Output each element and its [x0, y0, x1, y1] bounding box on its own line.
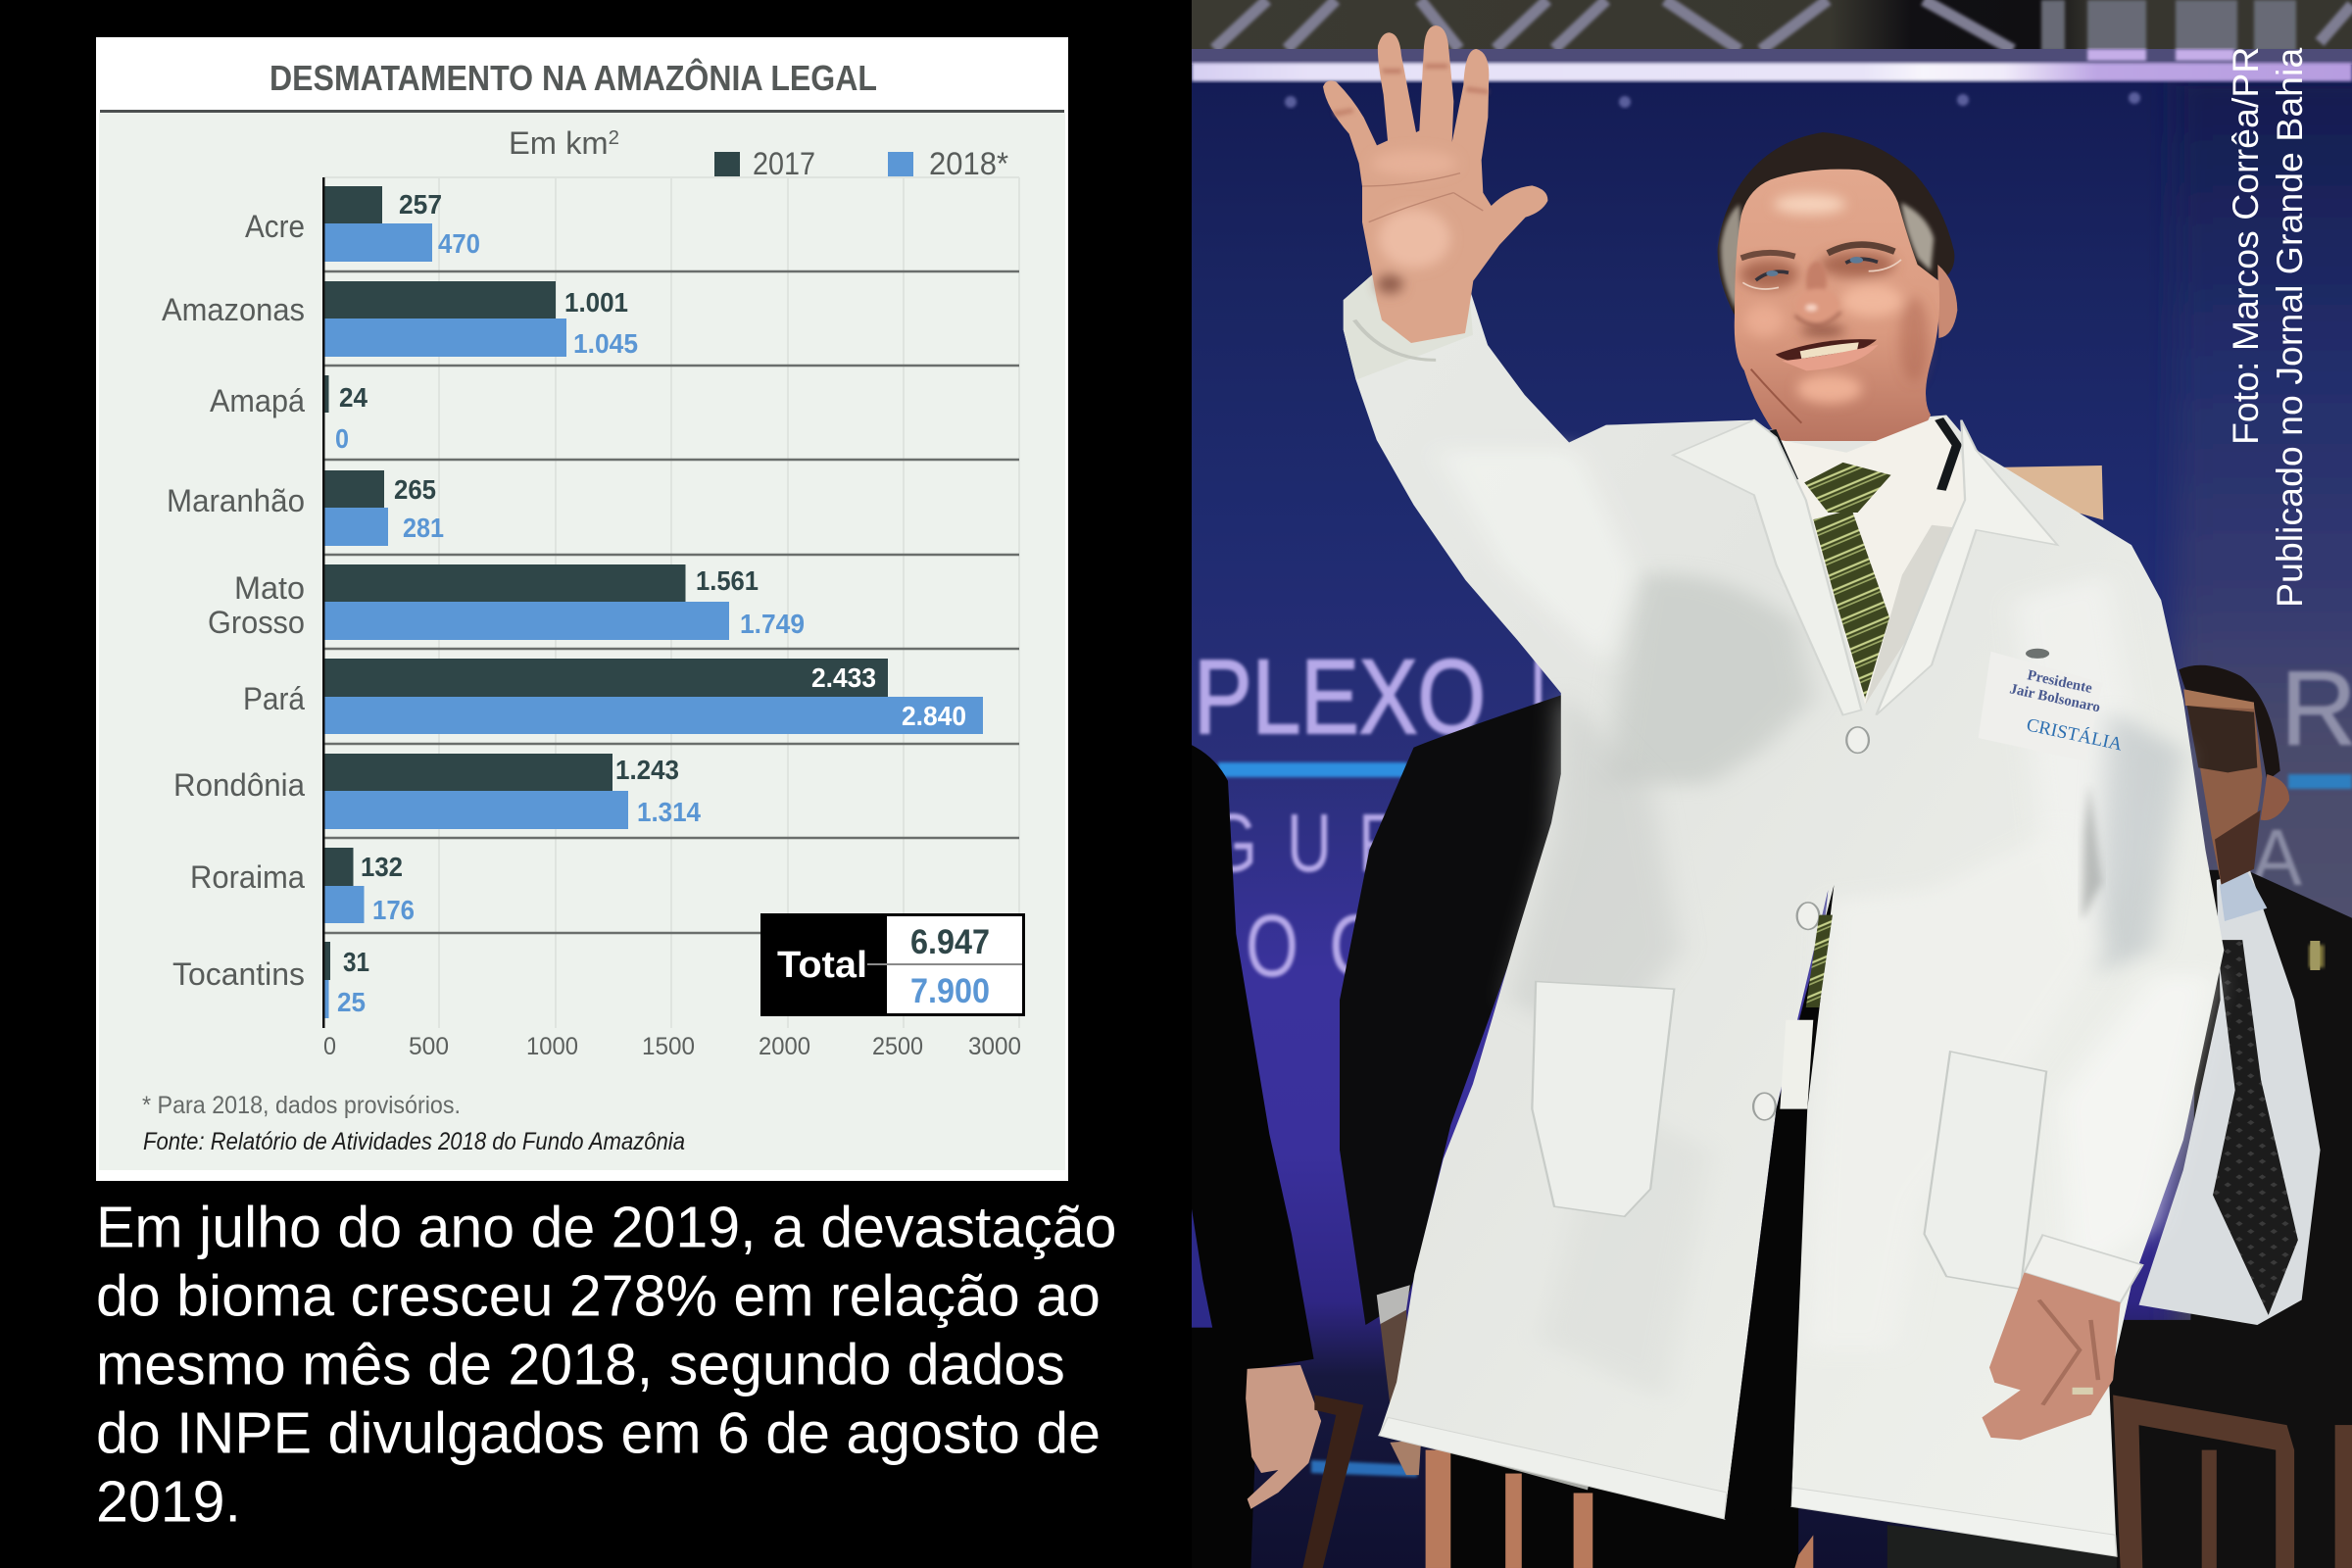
x axis labels: 2500 — [872, 1033, 923, 1060]
unit label: Em km — [509, 125, 607, 161]
backdrop lettering: PLEXO — [1194, 637, 1486, 756]
total box — [760, 913, 1025, 1016]
value labels: 281 — [403, 513, 444, 543]
backdrop lettering: I — [1530, 637, 1546, 756]
people and furniture behind — [1192, 665, 2352, 1568]
gold object behind shoulder — [1992, 466, 2103, 520]
value labels — [335, 189, 966, 1017]
state labels: Mato — [234, 570, 305, 606]
value labels: 1.314 — [637, 797, 701, 827]
x axis labels: 2000 — [759, 1033, 810, 1060]
x axis labels: 0 — [323, 1033, 336, 1060]
value labels: 1.561 — [696, 565, 759, 596]
value labels: 176 — [372, 895, 415, 925]
x axis labels: 500 — [409, 1033, 449, 1060]
badge text: CRISTÁLIA — [2025, 713, 2125, 756]
badge text: Jair Bolsonaro — [2008, 681, 2101, 715]
value labels: 2.840 — [902, 701, 966, 731]
head — [1718, 132, 1957, 441]
value labels: 31 — [343, 947, 369, 977]
text block: INPE paragraph: Em julho do ano de 2019, a devastação — [96, 1194, 1116, 1260]
value labels: 1.243 — [615, 755, 679, 785]
state labels: Pará — [243, 681, 305, 716]
value labels: 25 — [337, 987, 366, 1017]
photo credit: Publicado no Jornal Grande Bahia — [2269, 48, 2310, 608]
total box: 7.900 — [910, 972, 990, 1010]
value labels: 132 — [361, 852, 403, 882]
photo credit: Foto: Marcos Corrêa/PR — [2225, 47, 2266, 445]
value labels: 2.433 — [811, 662, 876, 693]
hem lining — [1468, 1457, 1589, 1490]
truss — [1192, 0, 2352, 108]
coat opening — [1725, 885, 1834, 1519]
white coat — [1344, 274, 2224, 1556]
value labels: 265 — [394, 474, 436, 505]
text block: INPE paragraph: do INPE divulgados em 6 de agosto de — [96, 1399, 1101, 1466]
tie — [1804, 463, 1891, 699]
coat shading — [1436, 450, 2213, 1400]
footnote: * Para 2018, dados provisórios. — [142, 1092, 461, 1119]
chart title: DESMATAMENTO NA AMAZÔNIA LEGAL — [270, 57, 877, 98]
badge text: Presidente — [2026, 667, 2094, 697]
text block: INPE paragraph: mesmo mês de 2018, segundo dados — [96, 1331, 1065, 1397]
value labels: 24 — [339, 382, 368, 413]
bars: 2017 — [323, 186, 888, 980]
lower hand — [1982, 1272, 2121, 1440]
x axis labels — [323, 1033, 1021, 1060]
bars: 2018 — [323, 223, 983, 1018]
name badge — [1979, 652, 2103, 761]
backdrop lettering: C — [1329, 898, 1382, 996]
coat buttons — [1753, 727, 1869, 1120]
raised hand — [1323, 25, 1547, 343]
state labels: Amapá — [210, 383, 305, 418]
chairs — [1302, 1395, 1363, 1568]
badge text — [2009, 670, 2121, 751]
value labels: 257 — [399, 189, 442, 220]
bar chart — [162, 177, 1021, 1060]
value labels: 470 — [438, 228, 480, 259]
state labels — [162, 209, 305, 992]
legend: 2017 — [753, 146, 815, 181]
total box: 6.947 — [910, 923, 990, 961]
figure: left woman in black — [1192, 745, 1314, 1568]
backdrop lettering: U — [1287, 797, 1332, 889]
state labels: Maranhão — [167, 483, 305, 518]
state labels: Acre — [245, 209, 305, 244]
text block: INPE paragraph: do bioma cresceu 278% em relação ao — [96, 1262, 1101, 1329]
state labels: Tocantins — [172, 956, 305, 992]
state labels: Rondônia — [173, 767, 305, 803]
figure: main subject — [1323, 25, 2224, 1556]
state labels: Roraima — [190, 859, 305, 895]
value labels: 1.749 — [740, 609, 805, 639]
guard head — [2179, 665, 2320, 970]
trousers — [1447, 1425, 1798, 1568]
backdrop lettering — [1198, 657, 2352, 980]
figure: right guard — [2109, 665, 2352, 1568]
panel: deforestation chart — [96, 37, 1068, 1181]
mouth — [1776, 339, 1879, 370]
state labels: Grosso — [208, 605, 305, 640]
text block: INPE paragraph: 2019. — [96, 1468, 241, 1535]
source: Fonte: Relatório de Atividades 2018 do Fundo Amazônia — [143, 1128, 685, 1155]
x axis labels: 1500 — [642, 1033, 695, 1060]
hand of woman — [1246, 1365, 1321, 1509]
raised arm cuff — [1344, 274, 1473, 380]
photo: president waving in white coat — [1192, 0, 2352, 1568]
total box: Total — [777, 945, 867, 986]
cyan stage stripes — [1218, 762, 2352, 1477]
photo credit — [2225, 47, 2310, 608]
backdrop lettering: G — [1208, 797, 1257, 889]
value labels: 0 — [335, 423, 349, 454]
lapels — [1673, 420, 1861, 715]
unit label: 2 — [609, 127, 619, 149]
shirt — [1780, 417, 1976, 705]
text block: INPE paragraph — [96, 1194, 1116, 1535]
backdrop lettering: R — [1358, 797, 1403, 889]
backdrop lettering: O — [1246, 898, 1298, 996]
backdrop lettering: A — [2251, 813, 2302, 903]
x axis labels: 3000 — [968, 1033, 1021, 1060]
x axis labels: 1000 — [526, 1033, 578, 1060]
stage backdrop — [1192, 0, 2352, 1568]
figure: man in dark suit — [1340, 693, 1569, 1325]
value labels: 1.001 — [564, 287, 628, 318]
state labels: Amazonas — [162, 292, 305, 327]
lower coat cuff — [2024, 1235, 2142, 1302]
legend — [714, 146, 1008, 181]
value labels: 1.045 — [573, 328, 638, 359]
coat pockets — [1532, 982, 2046, 1289]
legend: 2018* — [929, 146, 1008, 181]
